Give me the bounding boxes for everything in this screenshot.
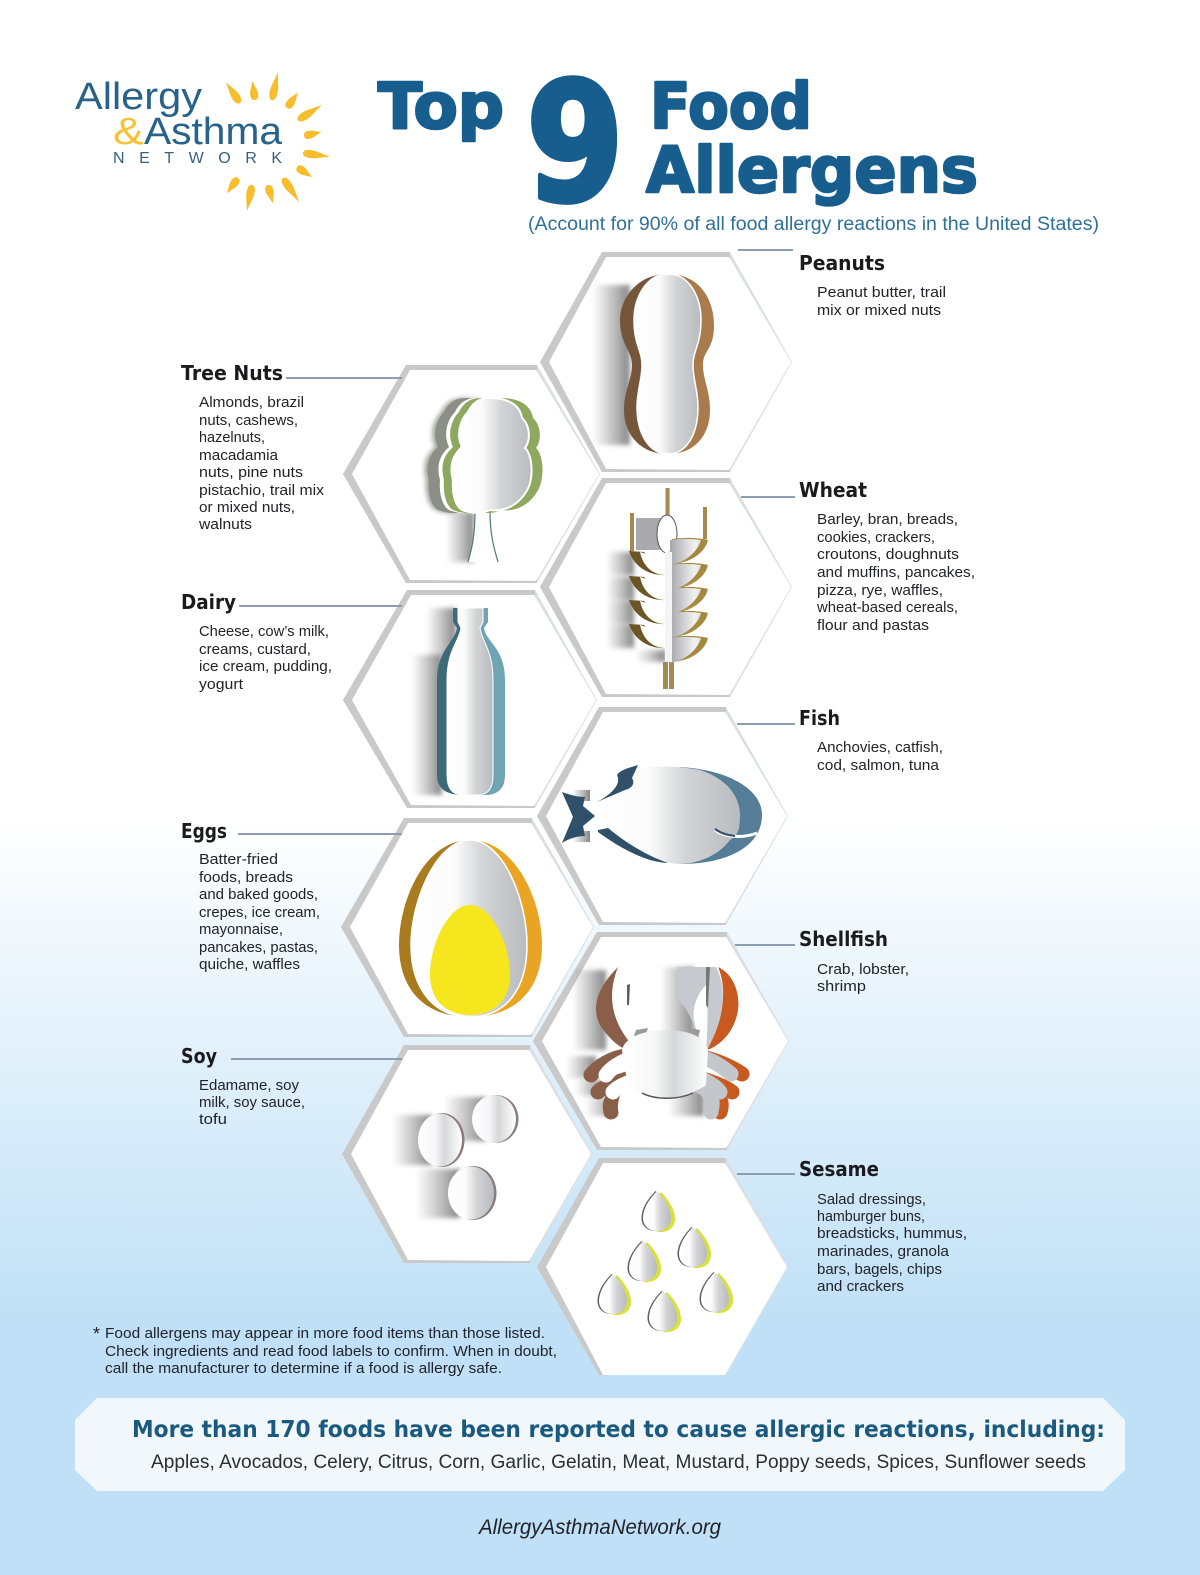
callout heading: More than 170 foods have been reported to cause allergic reactions, including: (132, 1417, 1105, 1443)
icon: peanut (592, 274, 714, 454)
callout list: Apples, Avocados, Celery, Citrus, Corn, Garlic, Gelatin, Meat, Mustard, Poppy seeds, Spices, Sunflower seeds (151, 1452, 1086, 1473)
icon: fish (562, 765, 762, 864)
text: wheat list (816, 511, 975, 634)
subtitle: (Account for 90% of all food allergy reactions in the United States) (528, 214, 1099, 235)
heading: Peanuts: Peanuts (799, 251, 885, 275)
text: tree nuts list: nuts, cashews, (199, 412, 298, 429)
text: fish list (817, 739, 943, 774)
text: footnote: * (93, 1324, 100, 1344)
text: dairy list: creams, custard, (199, 641, 311, 658)
text: sesame list: bars, bagels, chips (817, 1261, 942, 1278)
text: footnote (93, 1324, 557, 1377)
heading: Wheat: Wheat (799, 478, 867, 502)
logo: Allergy & Asthma Network: Asthma (144, 111, 283, 153)
panel: sesame (537, 1157, 967, 1375)
text: wheat list: Barley, bran, breads, (817, 511, 958, 528)
heading: Eggs: Eggs (181, 819, 227, 843)
panel: fish (537, 706, 943, 925)
text: wheat list: croutons, doughnuts (817, 546, 959, 563)
text: eggs list: pancakes, pastas, (199, 939, 318, 956)
title: Food (650, 70, 812, 143)
text: peanuts list: Peanut butter, trail (817, 284, 946, 301)
title: 9 (526, 47, 624, 239)
icon: sesame seeds (598, 1191, 733, 1332)
text: wheat list: flour and pastas (817, 617, 929, 634)
text: eggs list: crepes, ice cream, (199, 904, 320, 921)
text: soy list: Edamame, soy (199, 1077, 299, 1094)
icon: milk bottle (412, 608, 505, 795)
icon: wheat (606, 488, 708, 689)
callout: more than 170 foods (75, 1398, 1125, 1491)
text: sesame list: breadsticks, hummus, (817, 1225, 967, 1242)
text: dairy list: Cheese, cow’s milk, (199, 623, 329, 640)
text: shellfish list (817, 961, 909, 995)
logo: Allergy & Asthma Network: NETWORK (113, 150, 282, 167)
text: sesame list: Salad dressings, (817, 1191, 926, 1208)
text: eggs list: and baked goods, (199, 886, 318, 903)
text: eggs list: foods, breads (199, 869, 293, 886)
text: soy list (199, 1077, 305, 1128)
text: tree nuts list: hazelnuts, (199, 429, 265, 446)
icon: soybeans (392, 1095, 518, 1220)
logo: Allergy & Asthma Network: & (113, 111, 144, 153)
text: footnote: Food allergens may appear in more food items than those listed. (105, 1325, 545, 1342)
text: fish list: Anchovies, catfish, (817, 739, 943, 756)
text: eggs list (199, 851, 320, 973)
text: footnote: Check ingredients and read food labels to confirm. When in doubt, (105, 1343, 557, 1360)
text: sesame list: marinades, granola (817, 1243, 950, 1260)
text: wheat list: and muffins, pancakes, (817, 564, 975, 581)
text: sesame list: hamburger buns, (817, 1208, 925, 1225)
text: soy list: milk, soy sauce, (199, 1094, 305, 1111)
panel: tree nuts (181, 361, 600, 583)
panel: soy (181, 1044, 592, 1263)
logo: Allergy & Asthma Network: Allergy (75, 76, 202, 118)
heading: Fish: Fish (799, 706, 840, 730)
icon: sun rays (223, 72, 330, 211)
text: soy list: tofu (199, 1111, 227, 1128)
title: Top (378, 70, 504, 143)
text: sesame list (817, 1191, 967, 1295)
heading: Sesame: Sesame (799, 1157, 879, 1181)
icon: egg (399, 840, 542, 1017)
panel: wheat (540, 478, 975, 697)
text: wheat list: cookies, crackers, (817, 529, 935, 546)
text: tree nuts list: or mixed nuts, (199, 499, 295, 516)
text: tree nuts list: macadamia (199, 447, 279, 464)
text: eggs list: mayonnaise, (199, 921, 283, 938)
heading: Dairy: Dairy (181, 590, 236, 614)
icon: tree (424, 398, 543, 562)
heading: Soy: Soy (181, 1044, 217, 1068)
heading: Tree Nuts: Tree Nuts (181, 361, 283, 385)
panel: shellfish (533, 927, 909, 1150)
text: peanuts list: mix or mixed nuts (817, 302, 941, 319)
text: tree nuts list: Almonds, brazil (199, 394, 304, 411)
text: dairy list (199, 623, 332, 693)
text: fish list: cod, salmon, tuna (817, 757, 940, 774)
website url: AllergyAsthmaNetwork.org (477, 1516, 721, 1539)
title: Allergens (646, 134, 978, 207)
text: eggs list: Batter-fried (199, 851, 278, 868)
logo: Allergy & Asthma Network (75, 72, 330, 211)
text: footnote: call the manufacturer to determine if a food is allergy safe. (105, 1360, 502, 1377)
text: dairy list: ice cream, pudding, (199, 658, 332, 675)
panel: eggs (181, 818, 594, 1037)
text: wheat list: wheat-based cereals, (816, 599, 958, 616)
text: eggs list: quiche, waffles (199, 956, 300, 973)
text: tree nuts list (198, 394, 325, 533)
text: wheat list: pizza, rye, waffles, (817, 582, 943, 599)
panel: dairy (181, 590, 597, 808)
heading: Shellfish: Shellfish (799, 927, 888, 951)
text: tree nuts list: pistachio, trail mix (199, 482, 325, 499)
text: tree nuts list: nuts, pine nuts (199, 464, 303, 481)
panel: peanuts (540, 250, 946, 472)
text: sesame list: and crackers (817, 1278, 904, 1295)
text: dairy list: yogurt (199, 676, 244, 693)
text: shellfish list: Crab, lobster, (817, 961, 909, 978)
text: peanuts list (817, 284, 946, 319)
icon: crab (566, 967, 742, 1116)
text: shellfish list: shrimp (817, 978, 866, 995)
text: tree nuts list: walnuts (198, 516, 252, 533)
title (378, 47, 978, 239)
